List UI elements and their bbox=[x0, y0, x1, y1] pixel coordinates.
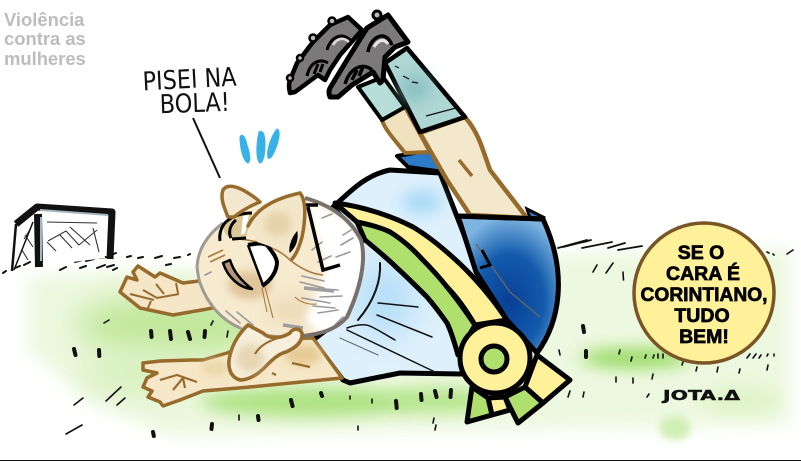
icon: sweat drops bbox=[240, 129, 279, 163]
arm and hand lower bbox=[143, 338, 342, 406]
speech line bbox=[193, 118, 220, 178]
front shoe bbox=[329, 11, 408, 97]
grass tufts bbox=[3, 240, 793, 436]
callout circle: TUDO bbox=[674, 305, 730, 327]
back sock bbox=[358, 77, 405, 120]
eye bbox=[220, 213, 252, 241]
collar lobe bbox=[229, 325, 302, 380]
callout circle: BEM! bbox=[679, 326, 729, 348]
callout circle: SE O bbox=[678, 242, 724, 264]
heading: Violência contra as mulheres bbox=[4, 9, 86, 69]
speech text: PISEI NA BOLA!: BOLA! bbox=[159, 88, 230, 120]
front leg bbox=[420, 117, 527, 218]
face lines bbox=[208, 239, 323, 275]
callout circle: CORINTIANO, bbox=[640, 284, 768, 306]
nose bbox=[248, 193, 305, 259]
front shorts bbox=[457, 209, 558, 353]
heading: Violência contra as mulheres: mulheres bbox=[4, 48, 86, 69]
heading: Violência contra as mulheres: contra as bbox=[4, 28, 86, 49]
back leg bbox=[382, 107, 430, 153]
left hand upper bbox=[120, 266, 213, 315]
grass field bbox=[28, 248, 790, 440]
heading: Violência contra as mulheres: Violência bbox=[4, 9, 85, 30]
back shoe bbox=[287, 17, 362, 93]
presidential sash bbox=[335, 203, 507, 355]
shirt shading bbox=[340, 191, 442, 372]
mouth bbox=[223, 244, 277, 289]
hair line bbox=[305, 205, 340, 270]
speech text: PISEI NA BOLA! bbox=[142, 63, 237, 120]
front sock bbox=[385, 48, 465, 132]
goal bbox=[12, 207, 112, 271]
head bbox=[197, 198, 370, 338]
rosette bbox=[460, 323, 570, 423]
speech text: PISEI NA BOLA!: PISEI NA bbox=[142, 63, 237, 97]
shirt bbox=[313, 170, 507, 383]
callout circle: CARA É bbox=[666, 262, 740, 285]
back shorts bbox=[397, 150, 443, 172]
ear bbox=[222, 186, 260, 217]
callout circle bbox=[634, 223, 774, 363]
signature: JOTA.Δ bbox=[661, 388, 741, 404]
